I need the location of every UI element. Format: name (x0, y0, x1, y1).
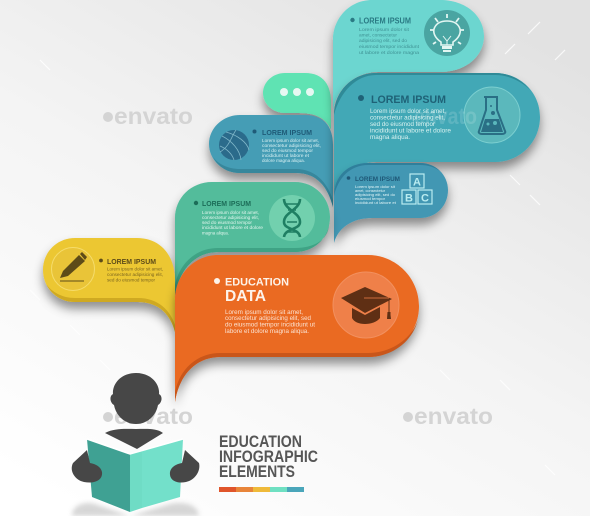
title: INFOGRAPHIC (219, 448, 318, 466)
bubble: alphabet blocks: eiusmod tempor (355, 196, 386, 201)
bubble: DNA: Lorem ipsum dolor sit amet, (202, 210, 259, 215)
icon: flask (464, 87, 520, 143)
bubble: pencil: consectetur adipisicing elit, (107, 272, 163, 277)
watermarks: envato (414, 403, 493, 429)
icon: DNA helix (269, 195, 315, 241)
bubble: chat dots (263, 73, 331, 130)
bubble: light bulb: Lorem ipsum dolor sit (359, 27, 410, 33)
bubble: education data: labore et dolore magna aliqua. (225, 329, 309, 335)
reflection (72, 503, 199, 516)
bubble: flask: sed do eiusmod tempor (370, 121, 435, 128)
bubble: education data: do eiusmod tempor incididunt ut (225, 322, 315, 328)
bubble: basketball: dolore magna aliqua. (262, 158, 305, 163)
title (219, 433, 318, 481)
title: ELEMENTS (219, 463, 295, 481)
title: EDUCATION (219, 433, 302, 451)
bubble: flask: magna aliqua. (370, 134, 410, 141)
bubble: education data: DATA (225, 288, 266, 305)
bubble: light bulb: LOREM IPSUM (359, 16, 411, 26)
icon: alphabet blocks: A (413, 176, 421, 188)
bubble: flask (334, 73, 540, 196)
bubble: DNA (175, 182, 330, 296)
icon: alphabet blocks: B (405, 192, 413, 204)
bubble: alphabet blocks: amet, consectetur (355, 188, 386, 193)
watermarks: envato (114, 103, 193, 129)
bubble: basketball: incididunt ut labore et (262, 153, 310, 158)
bubble: flask: LOREM IPSUM (371, 94, 446, 106)
bubble: education data: consectetur adipisicing elit, sed (225, 316, 311, 322)
bubble: flask: incididunt ut labore et dolore (370, 128, 452, 134)
bubble: alphabet blocks: adipisicing elit, sed do (355, 192, 395, 197)
bubble: pencil: sed do eiusmod tempor (107, 278, 156, 282)
watermark on flask bubble: envato (414, 103, 477, 129)
bubble: light bulb: eiusmod tempor incididunt (359, 44, 420, 50)
icon: pencil (52, 248, 94, 290)
bubble: DNA: magna aliqua. (202, 230, 229, 236)
bubble: light bulb: adipisicing elit, sed do (359, 38, 407, 44)
watermarks (103, 103, 493, 429)
person shoulders (105, 429, 163, 449)
bubble: light bulb (333, 0, 484, 110)
bubble: basketball: Lorem ipsum dolor sit amet, (262, 138, 319, 143)
bubble: DNA: incididunt ut labore et dolore (202, 225, 263, 230)
bubble: education data (175, 255, 419, 402)
icon: graduation cap (333, 272, 399, 338)
open book (87, 439, 183, 512)
colour bar (219, 487, 304, 492)
bubble: alphabet blocks: LOREM IPSUM (355, 176, 400, 183)
person reading a book (72, 373, 199, 516)
bubble: pencil: LOREM IPSUM (107, 257, 156, 266)
bubble: DNA: LOREM IPSUM (202, 199, 251, 208)
bubble: basketball: consectetur adipisicing elit, (262, 143, 321, 148)
bubble: light bulb: amet, consectetur (359, 32, 397, 38)
person head (110, 373, 162, 424)
left arm (72, 450, 102, 483)
icon: basketball (219, 130, 249, 160)
watermarks: envato (114, 403, 193, 429)
bubble: education data: EDUCATION (225, 276, 289, 288)
bubble: basketball (209, 115, 333, 207)
icon: alphabet blocks: C (421, 192, 429, 204)
bubble: pencil: Lorem ipsum dolor sit amet, (107, 266, 163, 272)
bubble: alphabet blocks (334, 163, 448, 243)
icon: alphabet blocks (402, 174, 432, 204)
bubble: alphabet blocks: Lorem ipsum dolor sit (355, 184, 396, 189)
bubble: light bulb: ut labore et dolore magna (359, 50, 419, 56)
icon: light bulb (424, 10, 470, 56)
bubble: pencil (43, 238, 175, 332)
bubble: flask: consectetur adipisicing elit, (370, 114, 445, 122)
bubble: flask: Lorem ipsum dolor sit amet, (370, 108, 446, 115)
bubble: basketball: sed do eiusmod tempor (262, 148, 313, 153)
right arm (170, 450, 199, 483)
bubble: DNA: consectetur adipisicing elit, (202, 215, 259, 220)
bubble: alphabet blocks: incididunt ut labore et (355, 200, 397, 205)
bubble: education data: Lorem ipsum dolor sit amet, (225, 310, 303, 316)
bubble: basketball: LOREM IPSUM (262, 128, 312, 137)
bubble: DNA: sed do eiusmod tempor (202, 220, 252, 225)
